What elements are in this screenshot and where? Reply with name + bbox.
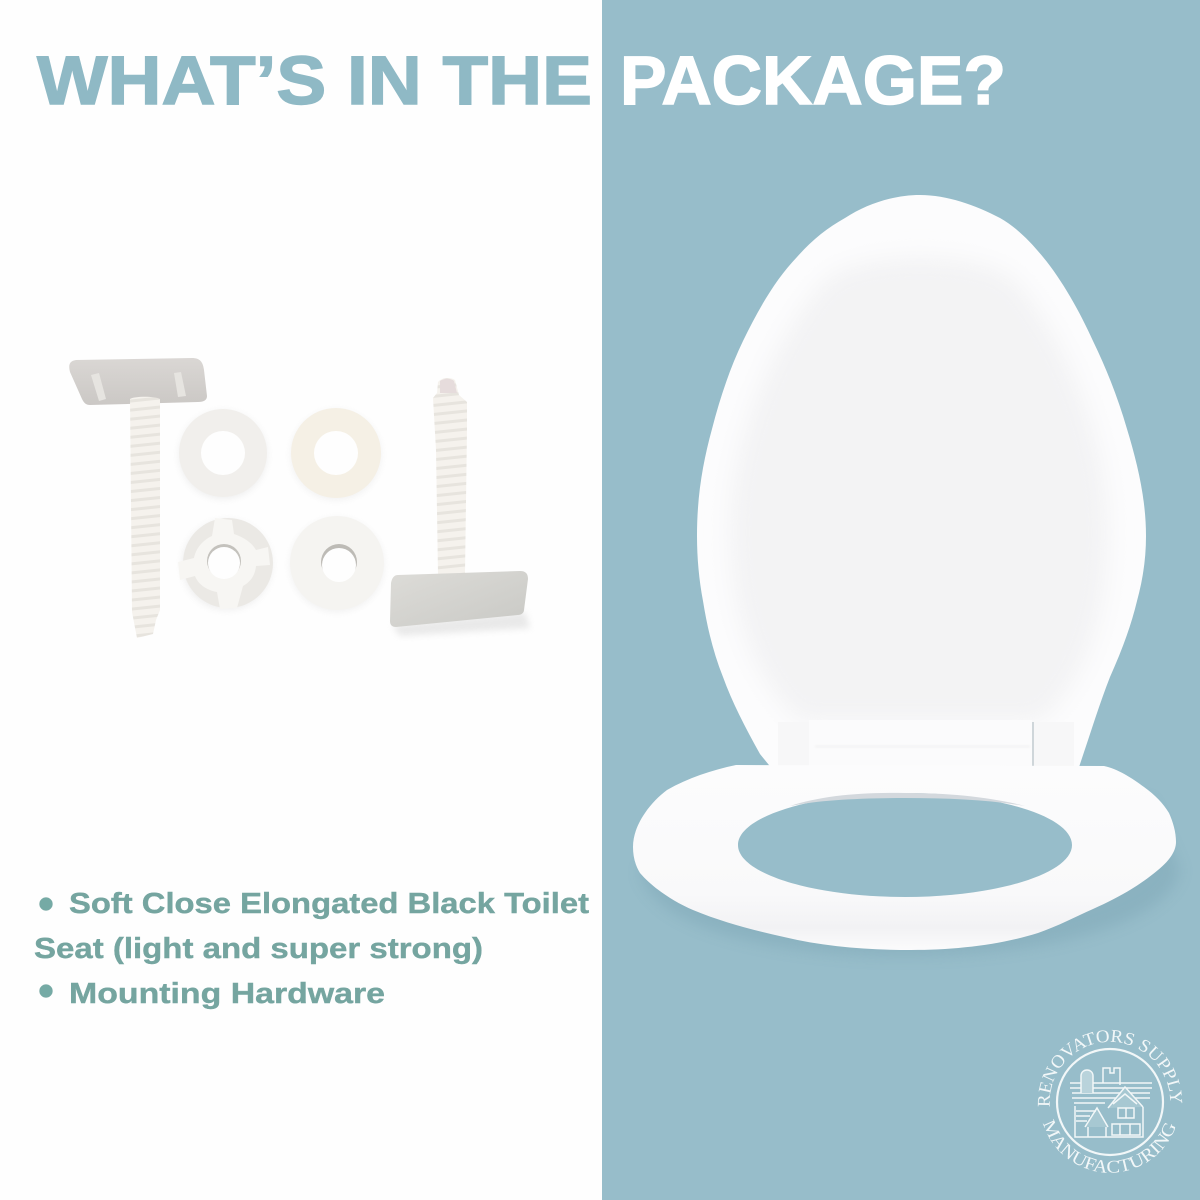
left bolt head	[69, 358, 207, 405]
head ribs	[91, 372, 186, 401]
lid inner panel	[730, 258, 1108, 722]
right bolt tip	[440, 379, 457, 393]
title	[37, 42, 1006, 119]
logo bottom text: MANUFACTURING	[1042, 1118, 1176, 1173]
right bolt head shadow	[392, 612, 530, 636]
nut with lugs	[178, 518, 273, 610]
title part: package: PACKAGE?	[620, 42, 1006, 119]
left bolt	[69, 358, 207, 638]
seat ring	[633, 765, 1176, 950]
right bolt head	[390, 571, 528, 627]
right bolt	[390, 378, 530, 636]
logo: Renovators Supply Manufacturing	[1038, 1030, 1182, 1173]
bullet list	[34, 888, 589, 1010]
title part: what's in the: WHAT’S IN THE	[37, 42, 592, 119]
washer 2	[291, 408, 381, 500]
logo house	[1070, 1068, 1152, 1137]
open lid	[697, 195, 1146, 770]
item 1 line 2: Seat (light and super strong)	[34, 933, 483, 965]
item 2: Mounting Hardware	[69, 978, 385, 1010]
white left panel	[0, 0, 602, 1200]
blue right panel	[602, 0, 1200, 1200]
seat hole inner edge	[790, 793, 1025, 806]
cap nut	[290, 516, 384, 612]
left bolt shank	[130, 397, 160, 638]
item 1 line 1: Soft Close Elongated Black Toilet	[69, 888, 589, 920]
right bolt shank	[433, 378, 467, 574]
seat shadow	[647, 856, 1176, 954]
logo ring	[1057, 1049, 1163, 1155]
bullet dot 2	[40, 984, 52, 998]
washer 1	[179, 409, 267, 499]
bullet dot 1	[40, 898, 52, 910]
hinge bar	[778, 720, 1074, 767]
hardware photo	[69, 358, 530, 638]
toilet seat photo	[633, 195, 1180, 956]
logo top text: RENOVATORS SUPPLY	[1038, 1030, 1182, 1106]
